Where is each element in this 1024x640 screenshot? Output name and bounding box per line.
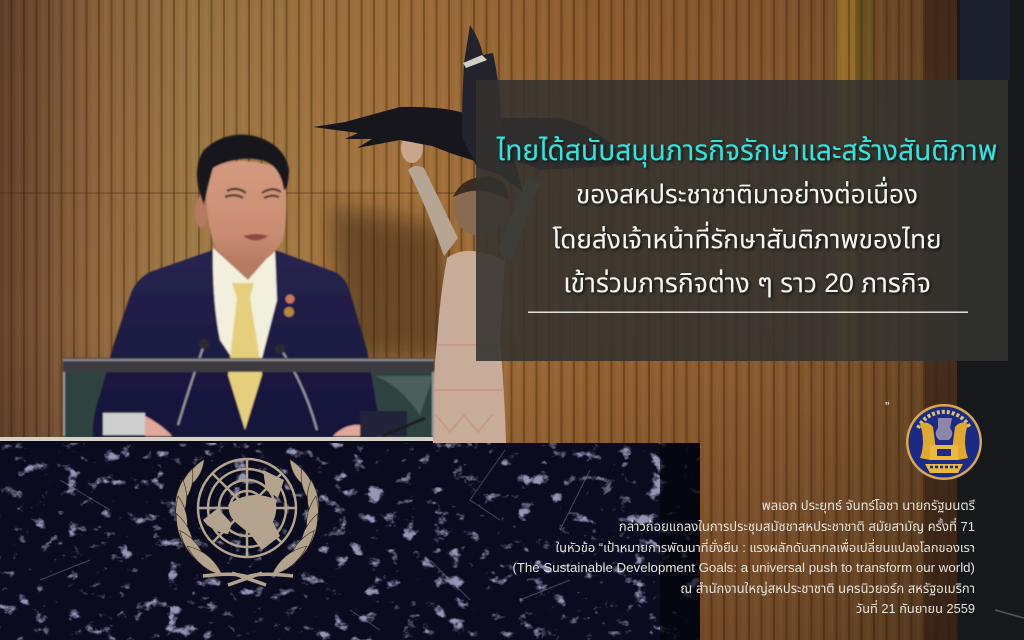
statue arm left <box>408 166 458 256</box>
suit <box>93 250 379 437</box>
seal centre urn <box>936 418 952 440</box>
statue head <box>453 178 507 236</box>
credit line 3: ในหัวข้อ “เป้าหมายการพัฒนาที่ยั่งยืน : แรงผลักดันสากลเพื่อเปลี่ยนแปลงโลกของเรา <box>555 539 975 555</box>
credit text block <box>512 498 975 616</box>
icon: government seal <box>906 404 982 480</box>
statue body <box>432 251 506 443</box>
paper and hands <box>103 413 145 435</box>
body line 2: ของสหประชาชาติมาอย่างต่อเนื่อง <box>576 176 918 209</box>
credit line 5: ณ สำนักงานใหญ่สหประชาชาติ นครนิวยอร์ก สหรัฐอเมริกา <box>680 581 975 596</box>
credit line 6: วันที่ 21 กันยายน 2559 <box>856 600 975 616</box>
man: speaker <box>63 135 434 438</box>
lectern top bar <box>63 358 434 372</box>
statue: woman holding bird <box>313 25 630 443</box>
bird left wing <box>313 107 478 162</box>
body line 3: โดยส่งเจ้าหน้าที่รักษาสันติภาพของไทย <box>552 221 942 254</box>
seal base band <box>925 464 963 473</box>
panel background <box>476 80 1008 361</box>
black device <box>360 411 407 436</box>
seal pedestal <box>930 445 958 460</box>
laurel wreath right <box>267 456 324 579</box>
glass lectern back <box>63 372 433 438</box>
quote mark: ” <box>885 399 889 414</box>
body line 4: เข้าร่วมภารกิจต่าง ๆ ราว 20 ภารกิจ <box>563 268 931 298</box>
statue hand <box>401 133 423 163</box>
laurel wreath left <box>170 456 227 579</box>
credit line 1: พลเอก ประยุทธ์ จันทร์โอชา นายกรัฐมนตรี <box>762 498 975 513</box>
statue arm right <box>497 175 540 260</box>
hair <box>197 135 289 205</box>
heading line: ไทยได้สนับสนุนภารกิจรักษาและสร้างสันติภาพ <box>496 134 997 167</box>
UN emblem <box>170 456 324 585</box>
credit line 2: กล่าวถ้อยแถลงในการประชุมสมัชชาสหประชาชาติ สมัยสามัญ ครั้งที่ 71 <box>619 517 975 534</box>
laurel stems <box>203 573 293 585</box>
shirt <box>213 246 277 358</box>
microphones <box>178 345 317 430</box>
lapel pins <box>286 294 294 304</box>
bird upper wing <box>462 25 523 192</box>
globe continents <box>203 470 284 550</box>
marble podium <box>0 437 700 640</box>
panel rule <box>528 312 968 313</box>
credit line 4: (The Sustainable Development Goals: a universal push to transform our world) <box>512 560 975 575</box>
seal lions <box>920 423 968 460</box>
translucent text panel <box>476 80 1008 361</box>
neck <box>213 225 278 280</box>
globe rings <box>198 459 296 557</box>
bird right wing <box>490 118 630 170</box>
face <box>206 161 286 264</box>
seal top lettering band <box>918 412 970 428</box>
tie <box>228 283 262 430</box>
